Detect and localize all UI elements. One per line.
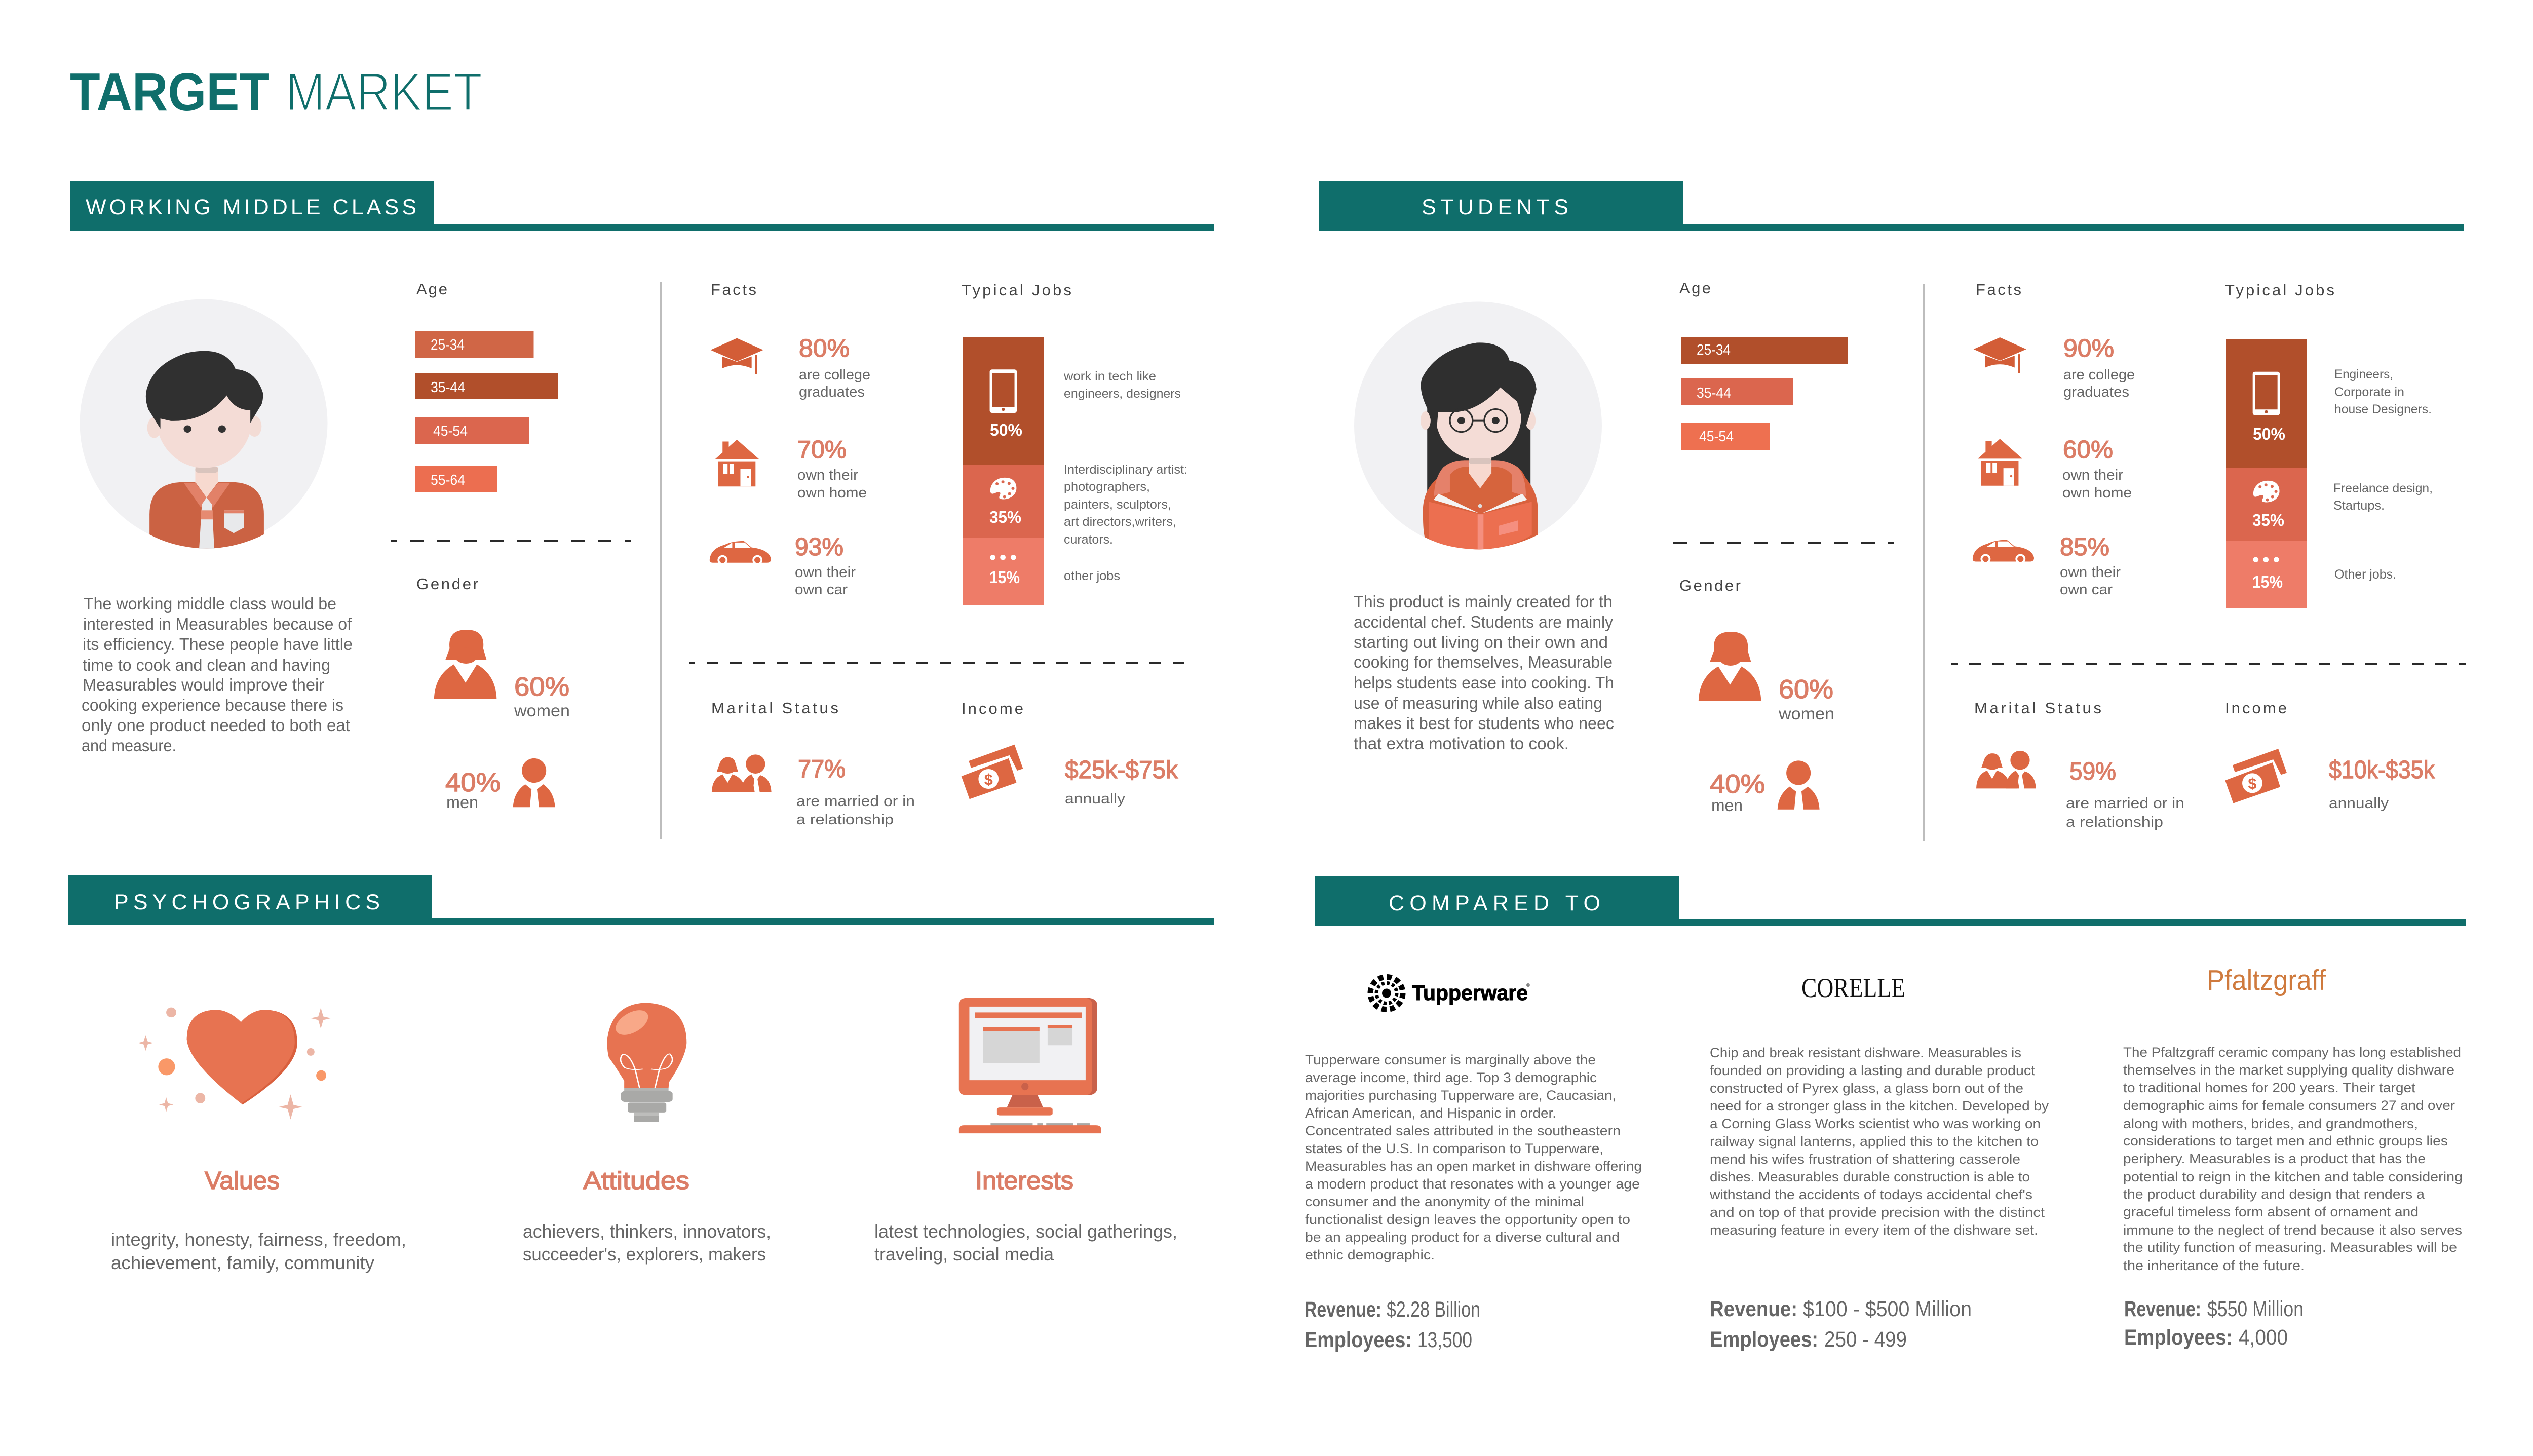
icon: dots bbox=[990, 555, 1016, 560]
facts: 70% bbox=[797, 436, 847, 464]
typical jobs: curators. bbox=[1064, 532, 1113, 547]
icon: heart bbox=[138, 1008, 331, 1120]
stats: pfaltzgraff bbox=[2124, 1297, 2304, 1350]
age chart: 55-64 bbox=[431, 472, 465, 488]
gender: 40% bbox=[445, 768, 501, 797]
text: corelle: Chip and break resistant dishware. Measurables is bbox=[1710, 1045, 2021, 1060]
typical jobs: other jobs bbox=[1064, 569, 1120, 583]
typical jobs: Interdisciplinary artist: bbox=[1064, 463, 1187, 477]
text: corelle: founded on providing a lasting and durable product bbox=[1710, 1063, 2036, 1078]
income: Income bbox=[962, 700, 1023, 717]
panel: students bbox=[1319, 181, 2466, 841]
description: working middle class: only one product needed to both eat bbox=[82, 716, 350, 735]
heading: interests: Interests bbox=[975, 1167, 1073, 1195]
logo: tupperware bbox=[1370, 977, 1530, 1009]
header: psychographics: PSYCHOGRAPHICS bbox=[114, 890, 380, 914]
facts: own car bbox=[795, 582, 848, 598]
text: tupperware: Measurables has an open market in dishware offering bbox=[1305, 1159, 1642, 1174]
gender bbox=[416, 575, 570, 812]
text: values: integrity, honesty, fairness, freedom, bbox=[111, 1229, 406, 1250]
text: interests: latest technologies, social gatherings, bbox=[874, 1221, 1177, 1242]
text: pfaltzgraff: to traditional homes for 200 years. Their target bbox=[2123, 1080, 2416, 1095]
income: students: Income bbox=[2225, 699, 2287, 717]
stats: tupperware: Revenue: bbox=[1304, 1297, 1381, 1322]
text: corelle: and on top of that provide precision with the distinct bbox=[1710, 1205, 2045, 1220]
icon: graduation cap bbox=[1974, 337, 2026, 373]
description: working middle class: Measurables would improve their bbox=[83, 675, 324, 694]
text: corelle: mend his wifes frustration of shattering casserole bbox=[1710, 1152, 2020, 1167]
description: students: cooking for themselves, Measurable bbox=[1354, 653, 1613, 671]
text: corelle: need for a stronger glass in the kitchen. Developed by bbox=[1710, 1098, 2049, 1114]
text: pfaltzgraff bbox=[2123, 1045, 2463, 1273]
stats: corelle bbox=[1710, 1297, 1972, 1352]
income: annually bbox=[1065, 791, 1126, 807]
typical jobs: students: Startups. bbox=[2333, 499, 2385, 513]
description: students: that extra motivation to cook. bbox=[1354, 734, 1569, 753]
logo: tupperware: Tupperware bbox=[1412, 981, 1528, 1005]
text: corelle: a Corning Glass Works scientist who was working on bbox=[1710, 1116, 2041, 1131]
text: tupperware: be an appealing product for a diverse cultural and bbox=[1305, 1230, 1620, 1245]
age chart: students: 25-34 bbox=[1697, 342, 1731, 358]
facts: Facts bbox=[711, 281, 756, 298]
header: working middle class bbox=[70, 181, 1214, 231]
facts: own their bbox=[795, 564, 856, 581]
text: pfaltzgraff: themselves in the market supplying quality dishware bbox=[2123, 1062, 2454, 1078]
facts: own their bbox=[797, 467, 858, 483]
description: students: starting out living on their own and bbox=[1354, 633, 1608, 652]
icon: computer monitor bbox=[959, 998, 1101, 1133]
text: interests: traveling, social media bbox=[874, 1244, 1054, 1265]
text: pfaltzgraff: the product durability and design that renders a bbox=[2123, 1186, 2425, 1202]
description: students: makes it best for students who neec bbox=[1354, 714, 1614, 733]
typical jobs: 35% bbox=[989, 508, 1021, 526]
icon: palette bbox=[990, 478, 1016, 500]
marital status: students: 59% bbox=[2069, 758, 2116, 785]
panel: working middle class bbox=[70, 181, 1214, 839]
stats: pfaltzgraff: $550 Million bbox=[2207, 1297, 2304, 1321]
facts: students: are college bbox=[2063, 367, 2135, 383]
typical jobs: students bbox=[2225, 281, 2433, 608]
text: pfaltzgraff: along with mothers, brides, and grandmothers, bbox=[2123, 1116, 2418, 1131]
age chart: students: Age bbox=[1679, 279, 1711, 297]
stats: corelle: Revenue: bbox=[1710, 1297, 1797, 1321]
income: students bbox=[2225, 699, 2435, 812]
text: values bbox=[111, 1229, 406, 1273]
heading: attitudes: Attitudes bbox=[583, 1167, 689, 1195]
text: tupperware: states of the U.S. In comparison to Tupperware, bbox=[1305, 1141, 1603, 1156]
facts: students: own their bbox=[2062, 467, 2123, 483]
typical jobs: 15% bbox=[989, 568, 1020, 587]
text: pfaltzgraff: considerations to target men and ethnic groups lies bbox=[2123, 1133, 2448, 1148]
description: students: use of measuring while also eating bbox=[1354, 694, 1602, 712]
description: working middle class: its efficiency. These people have little bbox=[83, 635, 353, 654]
text: tupperware bbox=[1305, 1052, 1642, 1262]
text: attitudes: achievers, thinkers, innovators, bbox=[523, 1221, 771, 1242]
icon: graduation cap bbox=[711, 338, 763, 374]
description: working middle class: interested in Measurables because of bbox=[83, 615, 352, 633]
facts: 93% bbox=[795, 533, 843, 561]
text: tupperware: ethnic demographic. bbox=[1305, 1247, 1435, 1262]
facts: students: 60% bbox=[2063, 436, 2113, 464]
description: students: helps students ease into cooking. Th bbox=[1354, 673, 1614, 692]
gender: students: men bbox=[1711, 796, 1743, 815]
stats: tupperware bbox=[1304, 1297, 1480, 1352]
marital status: 77% bbox=[798, 755, 846, 783]
facts: students: Facts bbox=[1976, 281, 2021, 298]
text: corelle: dishes. Measurables durable construction is able to bbox=[1710, 1169, 2030, 1184]
text: pfaltzgraff: The Pfaltzgraff ceramic company has long established bbox=[2123, 1045, 2461, 1060]
text: pfaltzgraff: periphery. Measurables is a product that has the bbox=[2123, 1151, 2426, 1166]
typical jobs: art directors,writers, bbox=[1064, 515, 1176, 529]
age chart: 25-34 bbox=[431, 337, 465, 353]
icon: tablet bbox=[2253, 372, 2280, 415]
gender: students bbox=[1679, 577, 1834, 815]
icon: house bbox=[715, 440, 759, 486]
age chart: 45-54 bbox=[433, 423, 468, 439]
stats: tupperware: Employees: bbox=[1304, 1328, 1412, 1352]
text: tupperware: average income, third age. Top 3 demographic bbox=[1305, 1070, 1597, 1085]
marital status: students: are married or in bbox=[2066, 795, 2184, 812]
title: MARKET bbox=[286, 62, 482, 122]
marital status bbox=[711, 699, 915, 828]
facts: graduates bbox=[799, 384, 865, 400]
title bbox=[70, 62, 482, 122]
text: values: achievement, family, community bbox=[111, 1252, 374, 1273]
header: working middle class: WORKING MIDDLE CLASS bbox=[86, 195, 416, 219]
icon: light bulb bbox=[607, 1003, 686, 1122]
icon: money bbox=[962, 745, 1023, 799]
marital status: students: a relationship bbox=[2066, 814, 2163, 830]
gender: Gender bbox=[416, 575, 478, 593]
avatar: working man bbox=[80, 299, 327, 549]
facts: are college bbox=[799, 367, 870, 383]
marital status: Marital Status bbox=[711, 699, 838, 717]
facts: students: 85% bbox=[2060, 533, 2109, 561]
header: students: STUDENTS bbox=[1422, 195, 1568, 219]
text: tupperware: majorities purchasing Tupperware are, Caucasian, bbox=[1305, 1088, 1616, 1103]
text: pfaltzgraff: graceful timeless form absent of ornament and bbox=[2123, 1204, 2419, 1219]
stats: corelle: 250 - 499 bbox=[1824, 1327, 1907, 1352]
icon: tablet bbox=[990, 369, 1017, 413]
text: tupperware: functionalist design leaves the opportunity open to bbox=[1305, 1212, 1630, 1227]
text: tupperware: consumer and the anonymity of the minimal bbox=[1305, 1194, 1584, 1209]
text: tupperware: Tupperware consumer is marginally above the bbox=[1305, 1052, 1596, 1067]
facts: students: graduates bbox=[2063, 384, 2129, 400]
description: students: accidental chef. Students are mainly bbox=[1354, 612, 1613, 631]
title: TARGET bbox=[70, 62, 270, 122]
income: students: annually bbox=[2329, 795, 2389, 812]
text: tupperware: African American, and Hispanic in order. bbox=[1305, 1105, 1556, 1121]
header: compared to bbox=[1315, 876, 2466, 926]
gender: 60% bbox=[514, 672, 569, 702]
marital status: are married or in bbox=[796, 793, 915, 810]
facts: own home bbox=[797, 485, 867, 501]
facts: students: 90% bbox=[2063, 335, 2114, 362]
panel: compared to bbox=[1304, 876, 2466, 1352]
text: pfaltzgraff: the utility function of measuring. Measurables will be bbox=[2123, 1240, 2457, 1255]
typical jobs: students: 15% bbox=[2252, 572, 2283, 591]
typical jobs: students: Corporate in bbox=[2334, 385, 2404, 399]
typical jobs: Typical Jobs bbox=[962, 281, 1071, 299]
stats: tupperware: 13,500 bbox=[1417, 1328, 1472, 1352]
typical jobs: painters, sculptors, bbox=[1064, 497, 1171, 512]
panel: psychographics bbox=[68, 875, 1214, 1273]
icon: dots bbox=[2253, 557, 2279, 562]
gender: students: 40% bbox=[1710, 770, 1765, 799]
age chart: students: 35-44 bbox=[1697, 385, 1731, 401]
text: attitudes: succeeder's, explorers, makers bbox=[523, 1244, 766, 1265]
age chart: students: 45-54 bbox=[1699, 429, 1734, 445]
facts: students: own their bbox=[2060, 564, 2121, 581]
description: working middle class: and measure. bbox=[82, 736, 176, 755]
description: working middle class: The working middle class would be bbox=[84, 594, 336, 613]
description: working middle class: time to cook and clean and having bbox=[83, 656, 330, 674]
header: students bbox=[1319, 181, 2464, 231]
logo: tupperware: ® bbox=[1526, 983, 1530, 988]
typical jobs: students: Typical Jobs bbox=[2225, 281, 2334, 299]
icon: car bbox=[1973, 540, 2034, 564]
description: working middle class bbox=[82, 594, 353, 755]
age chart: students bbox=[1679, 279, 1848, 450]
gender: women bbox=[514, 701, 570, 720]
marital status: a relationship bbox=[796, 812, 894, 828]
description: students bbox=[1354, 592, 1614, 753]
icon: house bbox=[1978, 439, 2022, 486]
description: students: This product is mainly created for th bbox=[1354, 592, 1613, 611]
header: psychographics bbox=[68, 875, 1214, 925]
typical jobs: photographers, bbox=[1064, 480, 1150, 494]
income: students: $10k-$35k bbox=[2329, 756, 2435, 784]
stats: pfaltzgraff: Revenue: bbox=[2124, 1297, 2201, 1321]
text: pfaltzgraff: immune to the neglect of trend because it also serves bbox=[2123, 1222, 2462, 1238]
typical jobs: students: 35% bbox=[2252, 511, 2284, 529]
stats: corelle: $100 - $500 Million bbox=[1803, 1297, 1972, 1321]
stats: pfaltzgraff: 4,000 bbox=[2239, 1325, 2288, 1350]
gender: students: women bbox=[1778, 704, 1834, 723]
typical jobs: work in tech like bbox=[1063, 369, 1156, 384]
text: pfaltzgraff: the inheritance of the future. bbox=[2123, 1258, 2305, 1273]
typical jobs: students: house Designers. bbox=[2334, 402, 2432, 416]
typical jobs: 50% bbox=[990, 420, 1022, 439]
age chart: 35-44 bbox=[431, 379, 465, 396]
icon: couple bbox=[1976, 751, 2036, 788]
marital status: students: Marital Status bbox=[1974, 699, 2101, 717]
stats: corelle: Employees: bbox=[1710, 1327, 1818, 1352]
typical jobs bbox=[962, 281, 1187, 605]
text: pfaltzgraff: demographic aims for female consumers 27 and over bbox=[2123, 1098, 2455, 1113]
text: attitudes bbox=[523, 1221, 771, 1265]
avatar: student bbox=[1354, 302, 1602, 549]
age chart: Age bbox=[416, 280, 447, 298]
gender: students: Gender bbox=[1679, 577, 1741, 594]
text: corelle bbox=[1709, 1045, 2049, 1238]
text: pfaltzgraff: potential to reign in the kitchen and table considering bbox=[2123, 1169, 2463, 1184]
text: corelle: railway signal lanterns, applied this to the kitchen to bbox=[1710, 1134, 2039, 1149]
text: corelle: constructed of Pyrex glass, a glass born out of the bbox=[1710, 1081, 2023, 1096]
facts: students: own car bbox=[2060, 582, 2113, 598]
logo: pfaltzgraff: Pfaltzgraff bbox=[2207, 964, 2326, 997]
gender: men bbox=[446, 793, 478, 812]
icon: car bbox=[710, 541, 771, 565]
facts: 80% bbox=[799, 335, 850, 362]
typical jobs: students: Engineers, bbox=[2334, 367, 2393, 381]
facts: students bbox=[1973, 281, 2135, 598]
stats: tupperware: $2.28 Billion bbox=[1387, 1297, 1480, 1322]
description: working middle class: cooking experience because there is bbox=[82, 696, 343, 714]
typical jobs: students: 50% bbox=[2253, 425, 2285, 443]
icon: palette bbox=[2253, 481, 2280, 503]
gender: students: 60% bbox=[1779, 675, 1833, 704]
typical jobs: students: Freelance design, bbox=[2333, 481, 2433, 495]
age chart bbox=[415, 280, 558, 492]
income: $25k-$75k bbox=[1065, 756, 1178, 784]
marital status: students bbox=[1974, 699, 2184, 830]
text: corelle: withstand the accidents of todays accidental chef's bbox=[1709, 1187, 2032, 1202]
facts: students: own home bbox=[2062, 485, 2132, 501]
text: interests bbox=[874, 1221, 1177, 1265]
logo: corelle: CORELLE bbox=[1801, 973, 1905, 1003]
typical jobs: engineers, designers bbox=[1064, 387, 1181, 401]
icon: money bbox=[2225, 749, 2287, 803]
icon: couple bbox=[712, 754, 772, 792]
text: tupperware: a modern product that resonates with a younger age bbox=[1305, 1176, 1640, 1192]
income bbox=[962, 700, 1178, 807]
stats: pfaltzgraff: Employees: bbox=[2124, 1325, 2233, 1350]
typical jobs: students: Other jobs. bbox=[2334, 567, 2396, 582]
text: tupperware: Concentrated sales attributed in the southeastern bbox=[1305, 1123, 1621, 1138]
text: corelle: measuring feature in every item of the dishware set. bbox=[1710, 1222, 2038, 1238]
heading: values: Values bbox=[205, 1167, 280, 1195]
facts bbox=[710, 281, 870, 598]
header: compared to: COMPARED TO bbox=[1389, 891, 1600, 915]
